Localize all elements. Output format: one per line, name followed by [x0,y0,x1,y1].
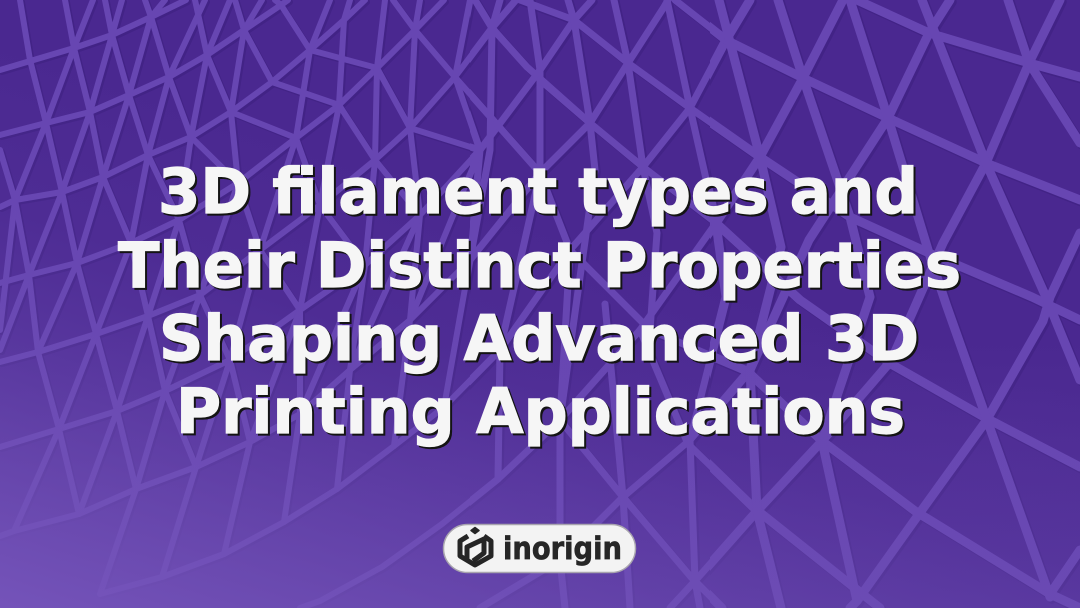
icon: hexagonal cube [460,528,491,565]
title: Their Distinct Properties [118,229,961,302]
title: Shaping Advanced 3D [159,302,919,375]
wordmark: inorigin [503,531,622,567]
title [118,155,961,448]
logo badge [444,524,636,572]
title: 3D filament types and [158,155,918,228]
title: Printing Applications [176,375,905,448]
